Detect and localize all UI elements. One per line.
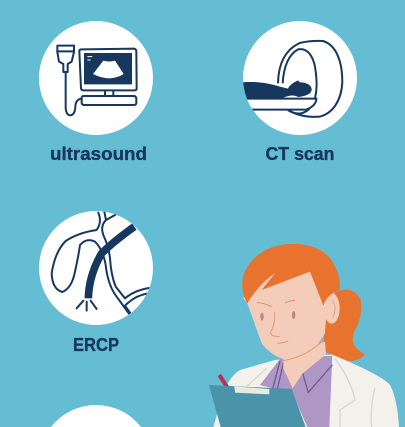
icon: CT scanner — [241, 21, 357, 135]
label: CT scan: CT scan — [266, 143, 334, 164]
face — [243, 267, 326, 362]
label: ultrasound: ultrasound — [50, 143, 147, 164]
purple shirt — [260, 356, 332, 427]
icon: partially visible circle — [51, 405, 141, 427]
ear — [324, 293, 340, 324]
icon: ultrasound machine — [39, 21, 153, 135]
label: ERCP: ERCP — [73, 334, 119, 355]
icon: ERCP ducts — [39, 211, 153, 325]
pen — [219, 375, 227, 387]
white coat — [213, 354, 399, 427]
neck — [283, 342, 326, 388]
clipboard — [209, 385, 306, 427]
illustration: doctor with clipboard — [209, 244, 399, 427]
ponytail — [323, 290, 365, 361]
hair — [242, 244, 340, 306]
